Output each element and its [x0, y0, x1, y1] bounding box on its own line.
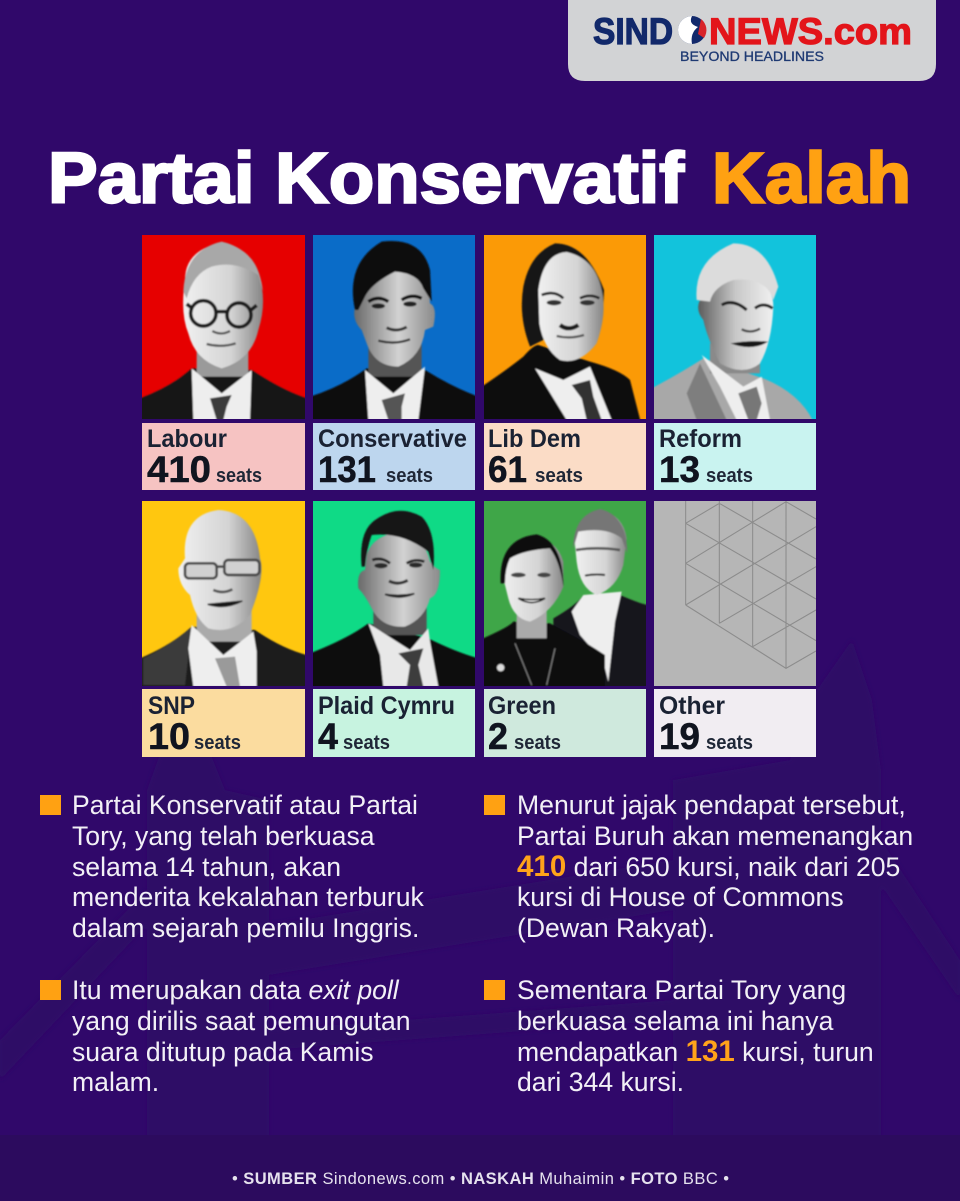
- panel: Conservative: [310, 235, 478, 490]
- label: Green 2 seats: 2: [488, 716, 508, 757]
- label: Conservative 131 seats: Conservative: [318, 425, 467, 453]
- panel: Plaid Cymru: [310, 501, 478, 757]
- text block: Labour 410 of 650: kursi di House of Commons: [517, 882, 844, 912]
- panel: Reform: [652, 235, 816, 490]
- label: Other 19 seats: Other: [659, 692, 725, 720]
- text block: exit poll: Itu merupakan data exit poll: [72, 975, 400, 1005]
- label: Other 19 seats: 19: [659, 716, 700, 757]
- panel: Lib Dem: [482, 235, 646, 490]
- text block: Tory in power 14 years: [40, 790, 425, 943]
- panel: Labour: [140, 235, 307, 490]
- label: Other 19 seats: seats: [706, 732, 753, 754]
- label: Plaid Cymru 4 seats: Plaid Cymru: [318, 692, 455, 720]
- text block: Tory 131 seats: [484, 975, 874, 1097]
- text block: exit poll: [40, 975, 411, 1097]
- logo tagline: BEYOND HEADLINES: [680, 49, 824, 64]
- text block: Tory in power 14 years: Tory, yang telah berkuasa: [72, 821, 375, 851]
- label: SNP 10 seats: [148, 692, 241, 757]
- label: Conservative 131 seats: [318, 425, 467, 490]
- text block: Labour 410 of 650: [484, 790, 913, 943]
- label: Plaid Cymru 4 seats: 4: [318, 716, 338, 757]
- label: Labour 410 seats: [147, 425, 262, 490]
- logo panel: [568, 0, 936, 81]
- label: Green 2 seats: [488, 692, 561, 757]
- label: Labour 410 seats: 410: [147, 449, 211, 490]
- text block: Labour 410 of 650: Partai Buruh akan memenangkan: [517, 821, 913, 851]
- text block: Labour 410 of 650: 410 dari 650 kursi, naik dari 205: [517, 850, 900, 883]
- text block: Labour 410 of 650: (Dewan Rakyat).: [517, 913, 715, 943]
- label: Plaid Cymru 4 seats: seats: [343, 732, 390, 754]
- logo wordmark left: SIND: [593, 11, 673, 52]
- text block: Tory in power 14 years: menderita kekalahan terburuk: [72, 882, 425, 912]
- label: Conservative 131 seats: 131: [318, 449, 376, 490]
- panel: SNP: [140, 501, 307, 757]
- label: Labour 410 seats: Labour: [147, 425, 227, 453]
- text block: Tory in power 14 years: dalam sejarah pemilu Inggris.: [72, 913, 419, 943]
- label: Green 2 seats: seats: [514, 732, 561, 754]
- text block: Tory in power 14 years: selama 14 tahun, akan: [72, 852, 341, 882]
- panel: Other: [654, 501, 816, 757]
- title: Partai Konservatif: [48, 140, 684, 218]
- label: Reform 13 seats: [659, 425, 753, 490]
- label: SNP 10 seats: 10: [148, 716, 190, 757]
- label: Reform 13 seats: Reform: [659, 425, 742, 453]
- text block: Tory in power 14 years: Partai Konservatif atau Partai: [72, 790, 418, 820]
- label: Lib Dem 61 seats: Lib Dem: [488, 425, 581, 453]
- title: Kalah: [712, 140, 911, 218]
- panel: Green: [482, 501, 648, 757]
- label: Lib Dem 61 seats: 61: [488, 449, 527, 490]
- text block: exit poll: yang dirilis saat pemungutan: [72, 1006, 411, 1036]
- label: Lib Dem 61 seats: seats: [535, 465, 583, 487]
- label: Labour 410 seats: seats: [216, 465, 262, 487]
- text block: Tory 131 seats: berkuasa selama ini hanya: [517, 1006, 834, 1036]
- label: Lib Dem 61 seats: [488, 425, 583, 490]
- label: Plaid Cymru 4 seats: [318, 692, 455, 757]
- label: Reform 13 seats: seats: [706, 465, 753, 487]
- label: Green 2 seats: Green: [488, 692, 556, 720]
- text block: Tory 131 seats: mendapatkan 131 kursi, turun: [517, 1035, 874, 1068]
- text block: Tory 131 seats: Sementara Partai Tory yang: [517, 975, 846, 1005]
- footer credits: • SUMBER Sindonews.com • NASKAH Muhaimin • FOTO BBC •: [232, 1170, 729, 1188]
- logo eagle emblem: [678, 16, 706, 44]
- label: Conservative 131 seats: seats: [386, 465, 433, 487]
- label: SNP 10 seats: SNP: [148, 692, 195, 720]
- text block: Tory 131 seats: dari 344 kursi.: [517, 1067, 684, 1097]
- label: Reform 13 seats: 13: [659, 449, 700, 490]
- text block: exit poll: malam.: [72, 1067, 159, 1097]
- label: Other 19 seats: [659, 692, 753, 757]
- text block: Labour 410 of 650: Menurut jajak pendapat tersebut,: [517, 790, 906, 820]
- text block: exit poll: suara ditutup pada Kamis: [72, 1037, 374, 1067]
- logo wordmark right: NEWS.com: [709, 11, 912, 52]
- label: SNP 10 seats: seats: [194, 732, 241, 754]
